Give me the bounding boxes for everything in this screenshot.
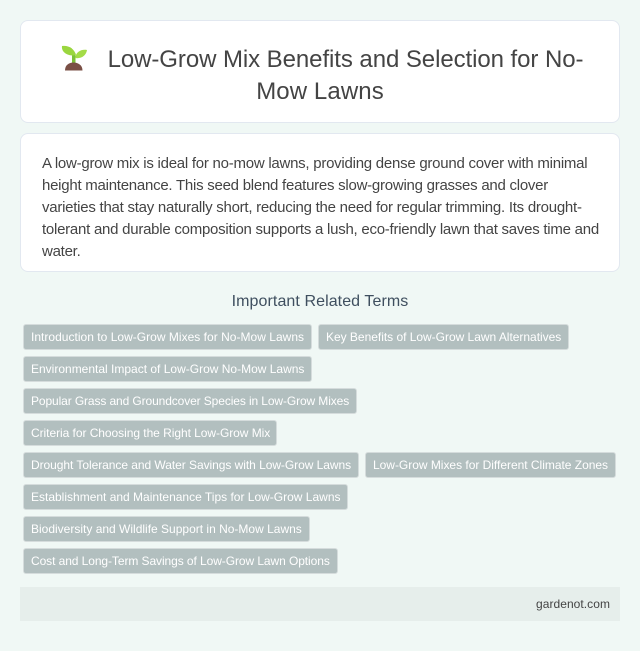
tag (23, 388, 357, 414)
tag: Criteria for Choosing the Right Low-Grow Mix (31, 426, 270, 440)
title: Low-Grow Mix Benefits and Selection for No- (108, 46, 583, 73)
tag (23, 356, 312, 382)
title (108, 46, 583, 105)
intro paragraph (42, 155, 599, 260)
related terms heading: Important Related Terms (232, 293, 408, 310)
tag (23, 452, 359, 478)
tag: Cost and Long-Term Savings of Low-Grow Lawn Options (31, 554, 330, 568)
tag: Drought Tolerance and Water Savings with Low-Grow Lawns (31, 458, 351, 472)
intro paragraph: height maintenance. This seed blend features slow-growing grasses and clover (42, 177, 548, 194)
tag: Environmental Impact of Low-Grow No-Mow Lawns (31, 362, 304, 376)
intro paragraph: A low-grow mix is ideal for no-mow lawns, providing dense ground cover with minimal (42, 155, 587, 172)
footer source: gardenot.com (536, 597, 610, 611)
tag: Biodiversity and Wildlife Support in No-Mow Lawns (31, 522, 302, 536)
title: Mow Lawns (256, 78, 384, 105)
tag (23, 548, 338, 574)
tag: Introduction to Low-Grow Mixes for No-Mow Lawns (31, 330, 304, 344)
tag: Popular Grass and Groundcover Species in Low-Grow Mixes (31, 394, 349, 408)
tag (23, 516, 310, 542)
tag: Low-Grow Mixes for Different Climate Zones (373, 458, 608, 472)
intro paragraph: water. (42, 243, 81, 260)
icon: sprout (62, 46, 87, 70)
intro paragraph: varieties that stay naturally short, reducing the need for regular trimming. Its drought- (42, 199, 582, 216)
footer (20, 587, 620, 621)
tag (23, 420, 277, 446)
title panel (20, 20, 620, 123)
intro text panel (20, 133, 620, 272)
tag: Establishment and Maintenance Tips for Low-Grow Lawns (31, 490, 340, 504)
tag (23, 324, 312, 350)
tag (23, 484, 348, 510)
related terms tags (23, 324, 616, 574)
tag (365, 452, 616, 478)
tag: Key Benefits of Low-Grow Lawn Alternatives (326, 330, 561, 344)
tag (318, 324, 569, 350)
intro paragraph: tolerant and durable composition supports a lush, eco-friendly lawn that saves time and (42, 221, 599, 238)
